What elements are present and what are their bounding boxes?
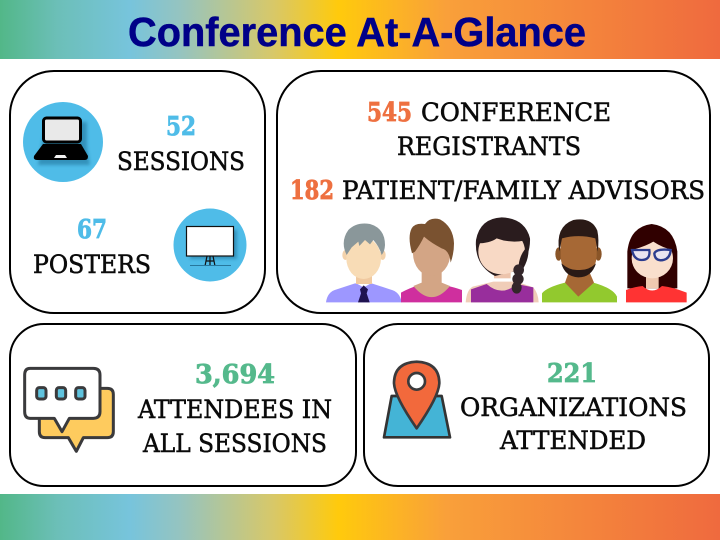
panel: registrants and advisors <box>277 71 710 313</box>
stat: 182 patient/family advisors: PATIENT/FAMILY ADVISORS <box>342 176 705 205</box>
stat: 221 organizations: ORGANIZATIONS <box>460 393 687 422</box>
people illustrations <box>326 217 687 302</box>
title: Conference At-A-Glance <box>128 9 586 55</box>
stat: 3,694 attendees: ALL SESSIONS <box>142 429 327 458</box>
panel: organizations <box>364 324 709 486</box>
icon: chat bubbles <box>25 368 113 451</box>
stat: 52 sessions: SESSIONS <box>117 147 245 176</box>
panel: sessions and posters <box>10 71 265 313</box>
stat: 3,694 attendees: ATTENDEES IN <box>137 395 332 424</box>
icon: poster screen <box>174 208 246 282</box>
stat: 221 organizations <box>460 359 687 455</box>
stat: 221 organizations: ATTENDED <box>499 426 646 455</box>
stat: 221 organizations: 221 <box>547 359 597 389</box>
stat: 545 conference registrants: 545 <box>367 98 412 128</box>
stat: 182 patient/family advisors: 182 <box>290 176 334 206</box>
icon: laptop <box>23 102 103 182</box>
stat: 545 conference registrants: CONFERENCE <box>421 98 611 127</box>
person: woman with glasses <box>626 224 687 302</box>
person: grey-haired man <box>326 223 402 302</box>
top gradient band <box>0 0 720 59</box>
stat: 67 posters: POSTERS <box>33 250 151 279</box>
stat: 52 sessions <box>117 112 245 176</box>
stat: 52 sessions: 52 <box>166 112 196 142</box>
stat: 67 posters: 67 <box>77 215 107 245</box>
stat: 545 conference registrants: REGISTRANTS <box>397 132 581 161</box>
stat: 3,694 attendees <box>137 360 332 458</box>
stat: 67 posters <box>33 215 151 279</box>
person: woman with short brown hair <box>401 219 462 302</box>
stat: 545 conference registrants <box>367 98 611 161</box>
panel: attendees <box>10 324 356 486</box>
icon: map pin <box>384 362 450 437</box>
stat: 3,694 attendees: 3,694 <box>195 360 275 390</box>
person: woman with dark braid <box>466 217 539 302</box>
person: man with beard <box>542 219 617 302</box>
bottom gradient band <box>0 494 720 540</box>
